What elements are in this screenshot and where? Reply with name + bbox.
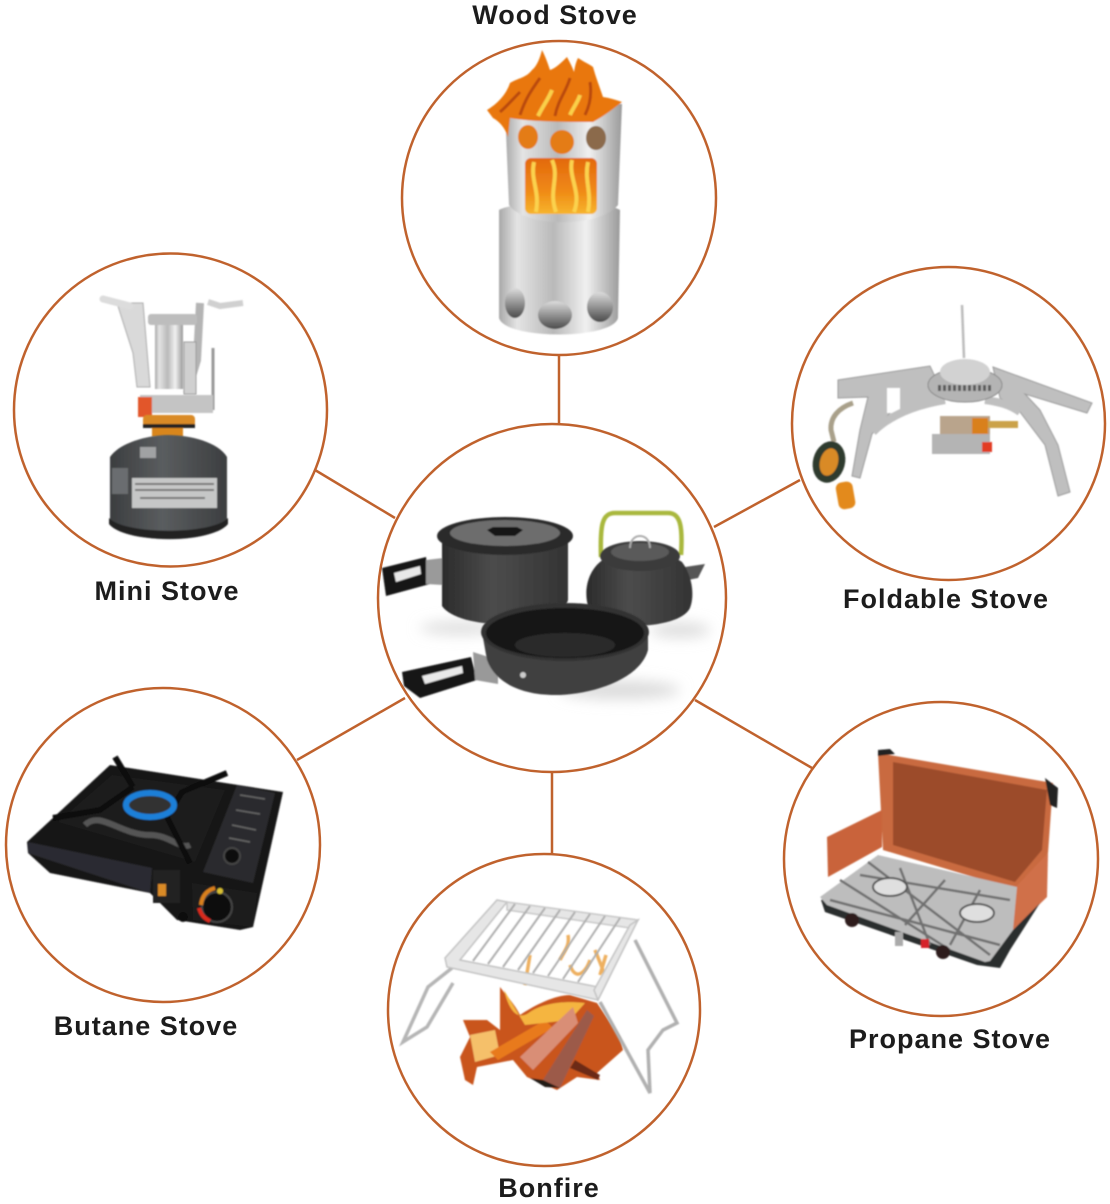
icon: mini stove burner	[103, 299, 243, 437]
icon: propane stove	[820, 749, 1058, 968]
icon: mini stove gas canister	[109, 435, 228, 539]
heading: Butane Stove: Butane Stove	[54, 1011, 238, 1041]
panel: butane stove	[6, 688, 320, 1002]
icon: foldable stove	[808, 305, 1092, 510]
panel: wood stove	[402, 41, 716, 355]
heading: Wood Stove: Wood Stove	[472, 0, 638, 30]
heading: Propane Stove: Propane Stove	[849, 1024, 1051, 1054]
icon: kettle	[586, 513, 705, 626]
icon: wood stove	[487, 50, 622, 334]
icon: folding grill	[403, 900, 677, 1093]
icon: cooking pot	[382, 517, 573, 624]
panel: central cookware	[378, 424, 726, 772]
connector lines	[297, 355, 812, 853]
heading: Foldable Stove: Foldable Stove	[843, 584, 1049, 614]
panel: bonfire	[388, 854, 700, 1166]
shadows under cookware	[420, 622, 710, 699]
panel: foldable stove	[792, 267, 1105, 580]
heading: Mini Stove: Mini Stove	[94, 576, 240, 606]
panel: propane stove	[784, 702, 1098, 1016]
panel: mini stove	[14, 254, 327, 566]
heading: Bonfire: Bonfire	[498, 1173, 600, 1203]
icon: frying pan	[402, 603, 649, 698]
icon: campfire	[460, 935, 623, 1090]
icon: butane stove	[27, 757, 283, 930]
